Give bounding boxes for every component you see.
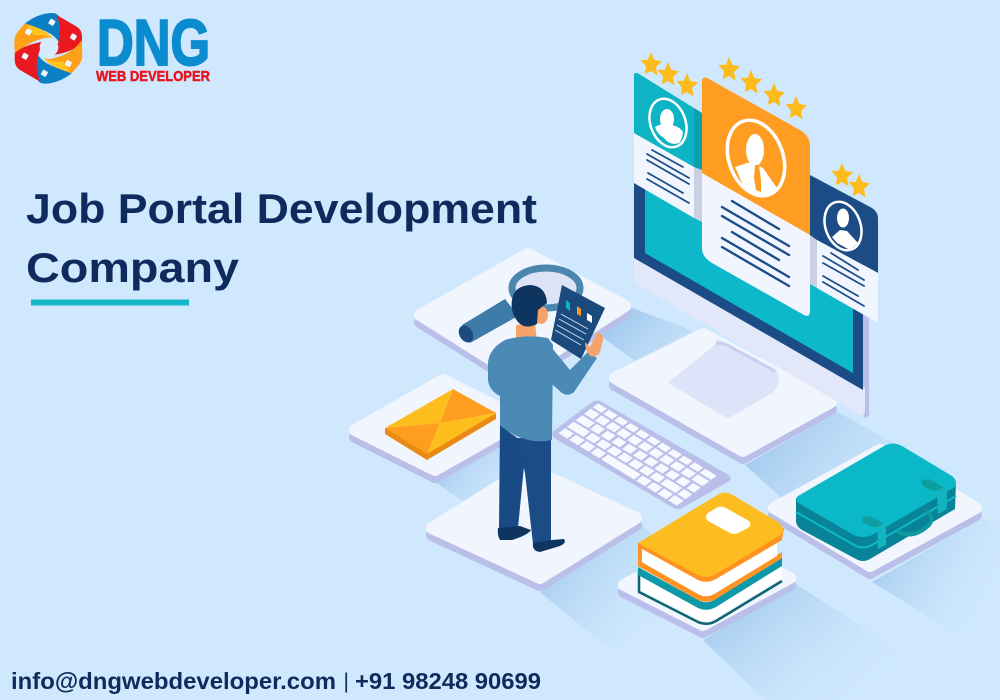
contact footer [11,668,541,694]
case seam [796,496,956,548]
contact footer: | [344,670,349,693]
plate: man [432,468,636,585]
logo tagline: WEB DEVELOPER [96,68,210,85]
logo [14,6,210,85]
profile card: left [634,52,702,222]
upper book orange edge [638,528,784,582]
title: Company [26,244,240,291]
side strip [810,235,817,288]
profile card: center [702,57,810,316]
magnifying glass [456,268,580,345]
handle [462,299,518,343]
monitor screen [645,130,853,373]
tablet lines [555,314,588,345]
logo mark [14,13,82,84]
stand contact edge [716,343,775,371]
computer monitor [634,100,869,418]
card header [702,78,810,235]
card body [817,240,878,323]
monitor frame [634,100,863,390]
hair [512,285,547,327]
straps [877,486,947,549]
floor shadows [435,308,1000,700]
strap tabs [862,479,943,528]
lower book pages [641,562,782,621]
avatar [643,94,693,152]
upper book pages [642,540,777,596]
monitor back side [862,230,869,418]
text lines [722,201,789,286]
rating stars [640,52,698,96]
plate: books [624,538,790,632]
hand [585,333,603,356]
side strip [694,108,702,222]
head [534,306,548,324]
handle [897,511,932,535]
rating stars [718,57,807,120]
keyboard [552,400,731,509]
plate: magnifier [420,254,625,383]
card header [810,175,878,273]
card body [702,172,810,316]
card header [634,73,694,167]
monitor stand base [668,338,779,418]
lower book cover [638,558,782,610]
case side [796,482,956,561]
handle end [456,323,476,345]
left leg [499,425,526,528]
right leg [517,438,551,544]
lens [512,268,580,308]
upper book bottom cover [638,552,782,602]
tablet [551,285,605,359]
avatar [717,112,795,204]
plate: suitcase [774,450,976,573]
contact footer: +91 98248 90699 [355,668,541,694]
book label [706,507,750,534]
text lines [647,150,689,203]
books [638,492,784,624]
tablet tags [566,300,592,323]
title [26,185,537,291]
lower book outline [639,570,782,624]
plate: envelope [355,380,523,477]
man with tablet [488,285,605,552]
envelope [385,389,496,460]
text lines [823,253,864,306]
title: Job Portal Development [26,185,537,232]
contact footer: info@dngwebdeveloper.com [11,668,336,694]
neck [516,322,537,342]
plate: monitor desk [615,334,831,458]
rating stars [832,163,870,198]
profile card: right [810,163,878,323]
shoes [498,526,565,552]
card body [634,133,694,218]
case top [796,444,956,537]
torso [488,336,553,441]
arm [545,342,597,395]
logo wordmark: DNG [97,6,210,79]
monitor chin [634,258,865,416]
suitcase [796,444,956,561]
upper book cover [638,492,783,577]
title underline [31,300,189,306]
avatar [818,197,868,255]
